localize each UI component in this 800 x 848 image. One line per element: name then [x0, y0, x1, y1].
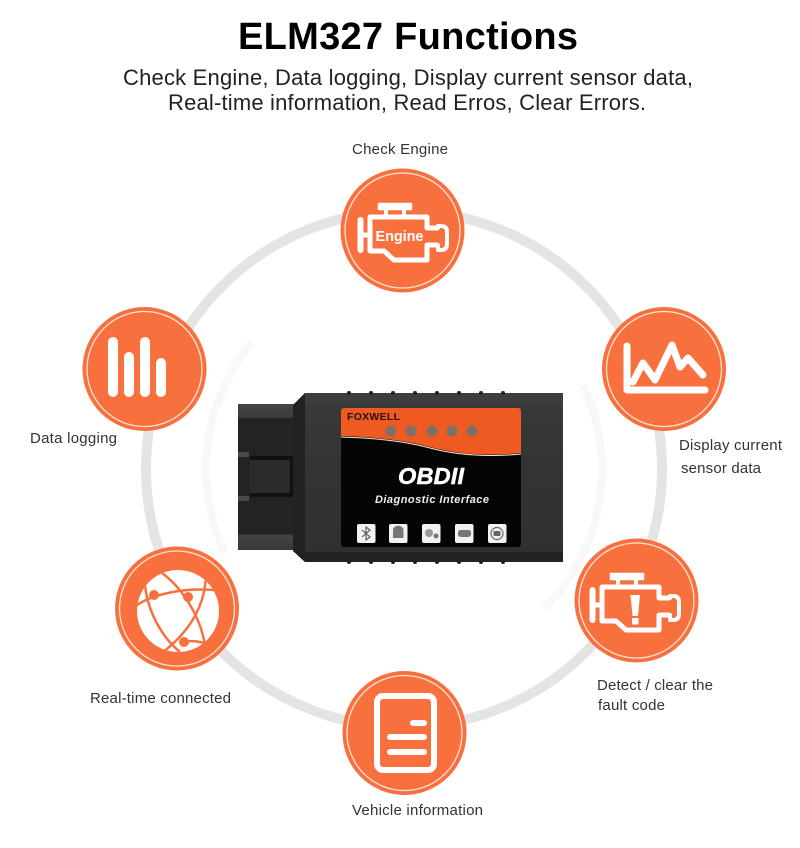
node: Check Engine: Engine — [376, 229, 424, 245]
icon: bars — [108, 337, 166, 397]
node: Detect / clear the fault code — [574, 538, 698, 662]
label: Detect / clear the fault code: fault code — [598, 697, 665, 714]
outer ring — [146, 211, 662, 727]
subtitle — [123, 65, 693, 115]
icon: line chart — [627, 345, 705, 390]
label: Display current sensor data: Display current — [679, 437, 783, 454]
label: Check Engine: Check Engine — [352, 141, 448, 158]
subtitle: Check Engine, Data logging, Display current sensor data, — [123, 65, 693, 90]
icon: engine — [360, 204, 447, 260]
label: Display current sensor data: sensor data — [681, 460, 762, 477]
icon: exclamation mark — [630, 595, 640, 624]
orange header band — [341, 408, 521, 455]
brand name: FOXWELL — [347, 411, 401, 423]
inner ring — [206, 342, 602, 609]
subtitle: Real-time information, Read Erros, Clear Errors. — [168, 90, 646, 115]
white wave line — [341, 437, 521, 456]
label: Vehicle information: Vehicle information — [352, 802, 483, 819]
device: OBDII adapter — [238, 391, 563, 564]
label: Detect / clear the fault code — [597, 677, 713, 714]
node: Real-time connected — [115, 546, 239, 670]
label: Display current sensor data — [679, 437, 783, 477]
node: Vehicle information — [342, 671, 466, 795]
housing pins — [347, 391, 505, 564]
housing — [293, 393, 563, 562]
feature tiles — [357, 524, 506, 543]
connector — [238, 404, 296, 550]
Diagnostic Interface text: Diagnostic Interface — [375, 494, 489, 506]
node: Display current sensor data — [602, 307, 726, 431]
OBDII text: OBDII — [398, 463, 464, 489]
label: Real-time connected: Real-time connected — [90, 690, 231, 707]
status LEDs — [386, 426, 478, 436]
label panel — [341, 408, 521, 547]
label: Detect / clear the fault code: Detect / clear the — [597, 677, 713, 694]
icon: globe — [136, 570, 222, 652]
label: Data logging: Data logging — [30, 430, 117, 447]
node: Data logging — [82, 307, 206, 431]
icon: document — [377, 696, 434, 770]
node: Check Engine — [340, 168, 464, 292]
icon text: Engine — [374, 226, 424, 245]
title: ELM327 Functions — [238, 16, 578, 58]
icon: fault engine — [592, 574, 679, 630]
